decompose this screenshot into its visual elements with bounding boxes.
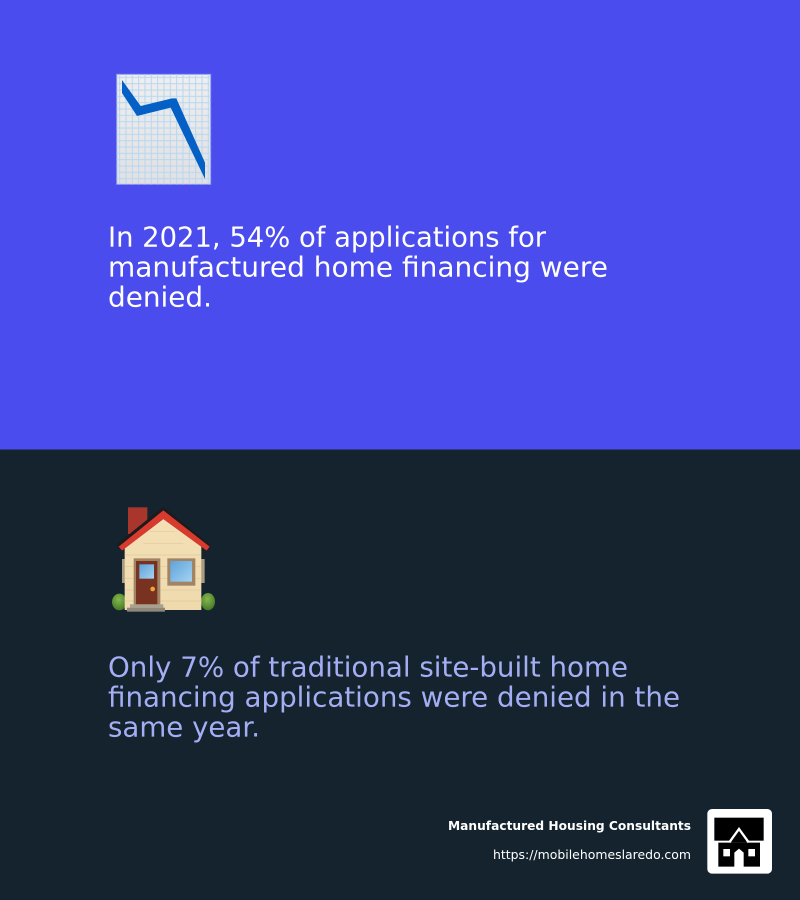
text: bottom statistic: same year.	[108, 710, 260, 744]
text: top statistic: manufactured home financing were	[108, 250, 608, 284]
text: top statistic	[108, 220, 608, 314]
panel: top statistic	[0, 0, 800, 450]
text: bottom statistic: Only 7% of traditional site-built home	[108, 650, 628, 684]
icon: house	[112, 507, 215, 612]
text: top statistic: In 2021, 54% of applications for	[108, 220, 546, 254]
footer: company name: Manufactured Housing Consultants	[448, 818, 691, 833]
panel: bottom statistic	[0, 450, 800, 900]
text: bottom statistic: financing applications were denied in the	[108, 680, 680, 714]
footer: website url: https://mobilehomeslaredo.com	[493, 847, 691, 862]
text: top statistic: denied.	[108, 280, 212, 314]
icon: falling chart	[117, 74, 211, 184]
text: bottom statistic	[108, 650, 680, 744]
icon: company logo	[707, 809, 772, 874]
